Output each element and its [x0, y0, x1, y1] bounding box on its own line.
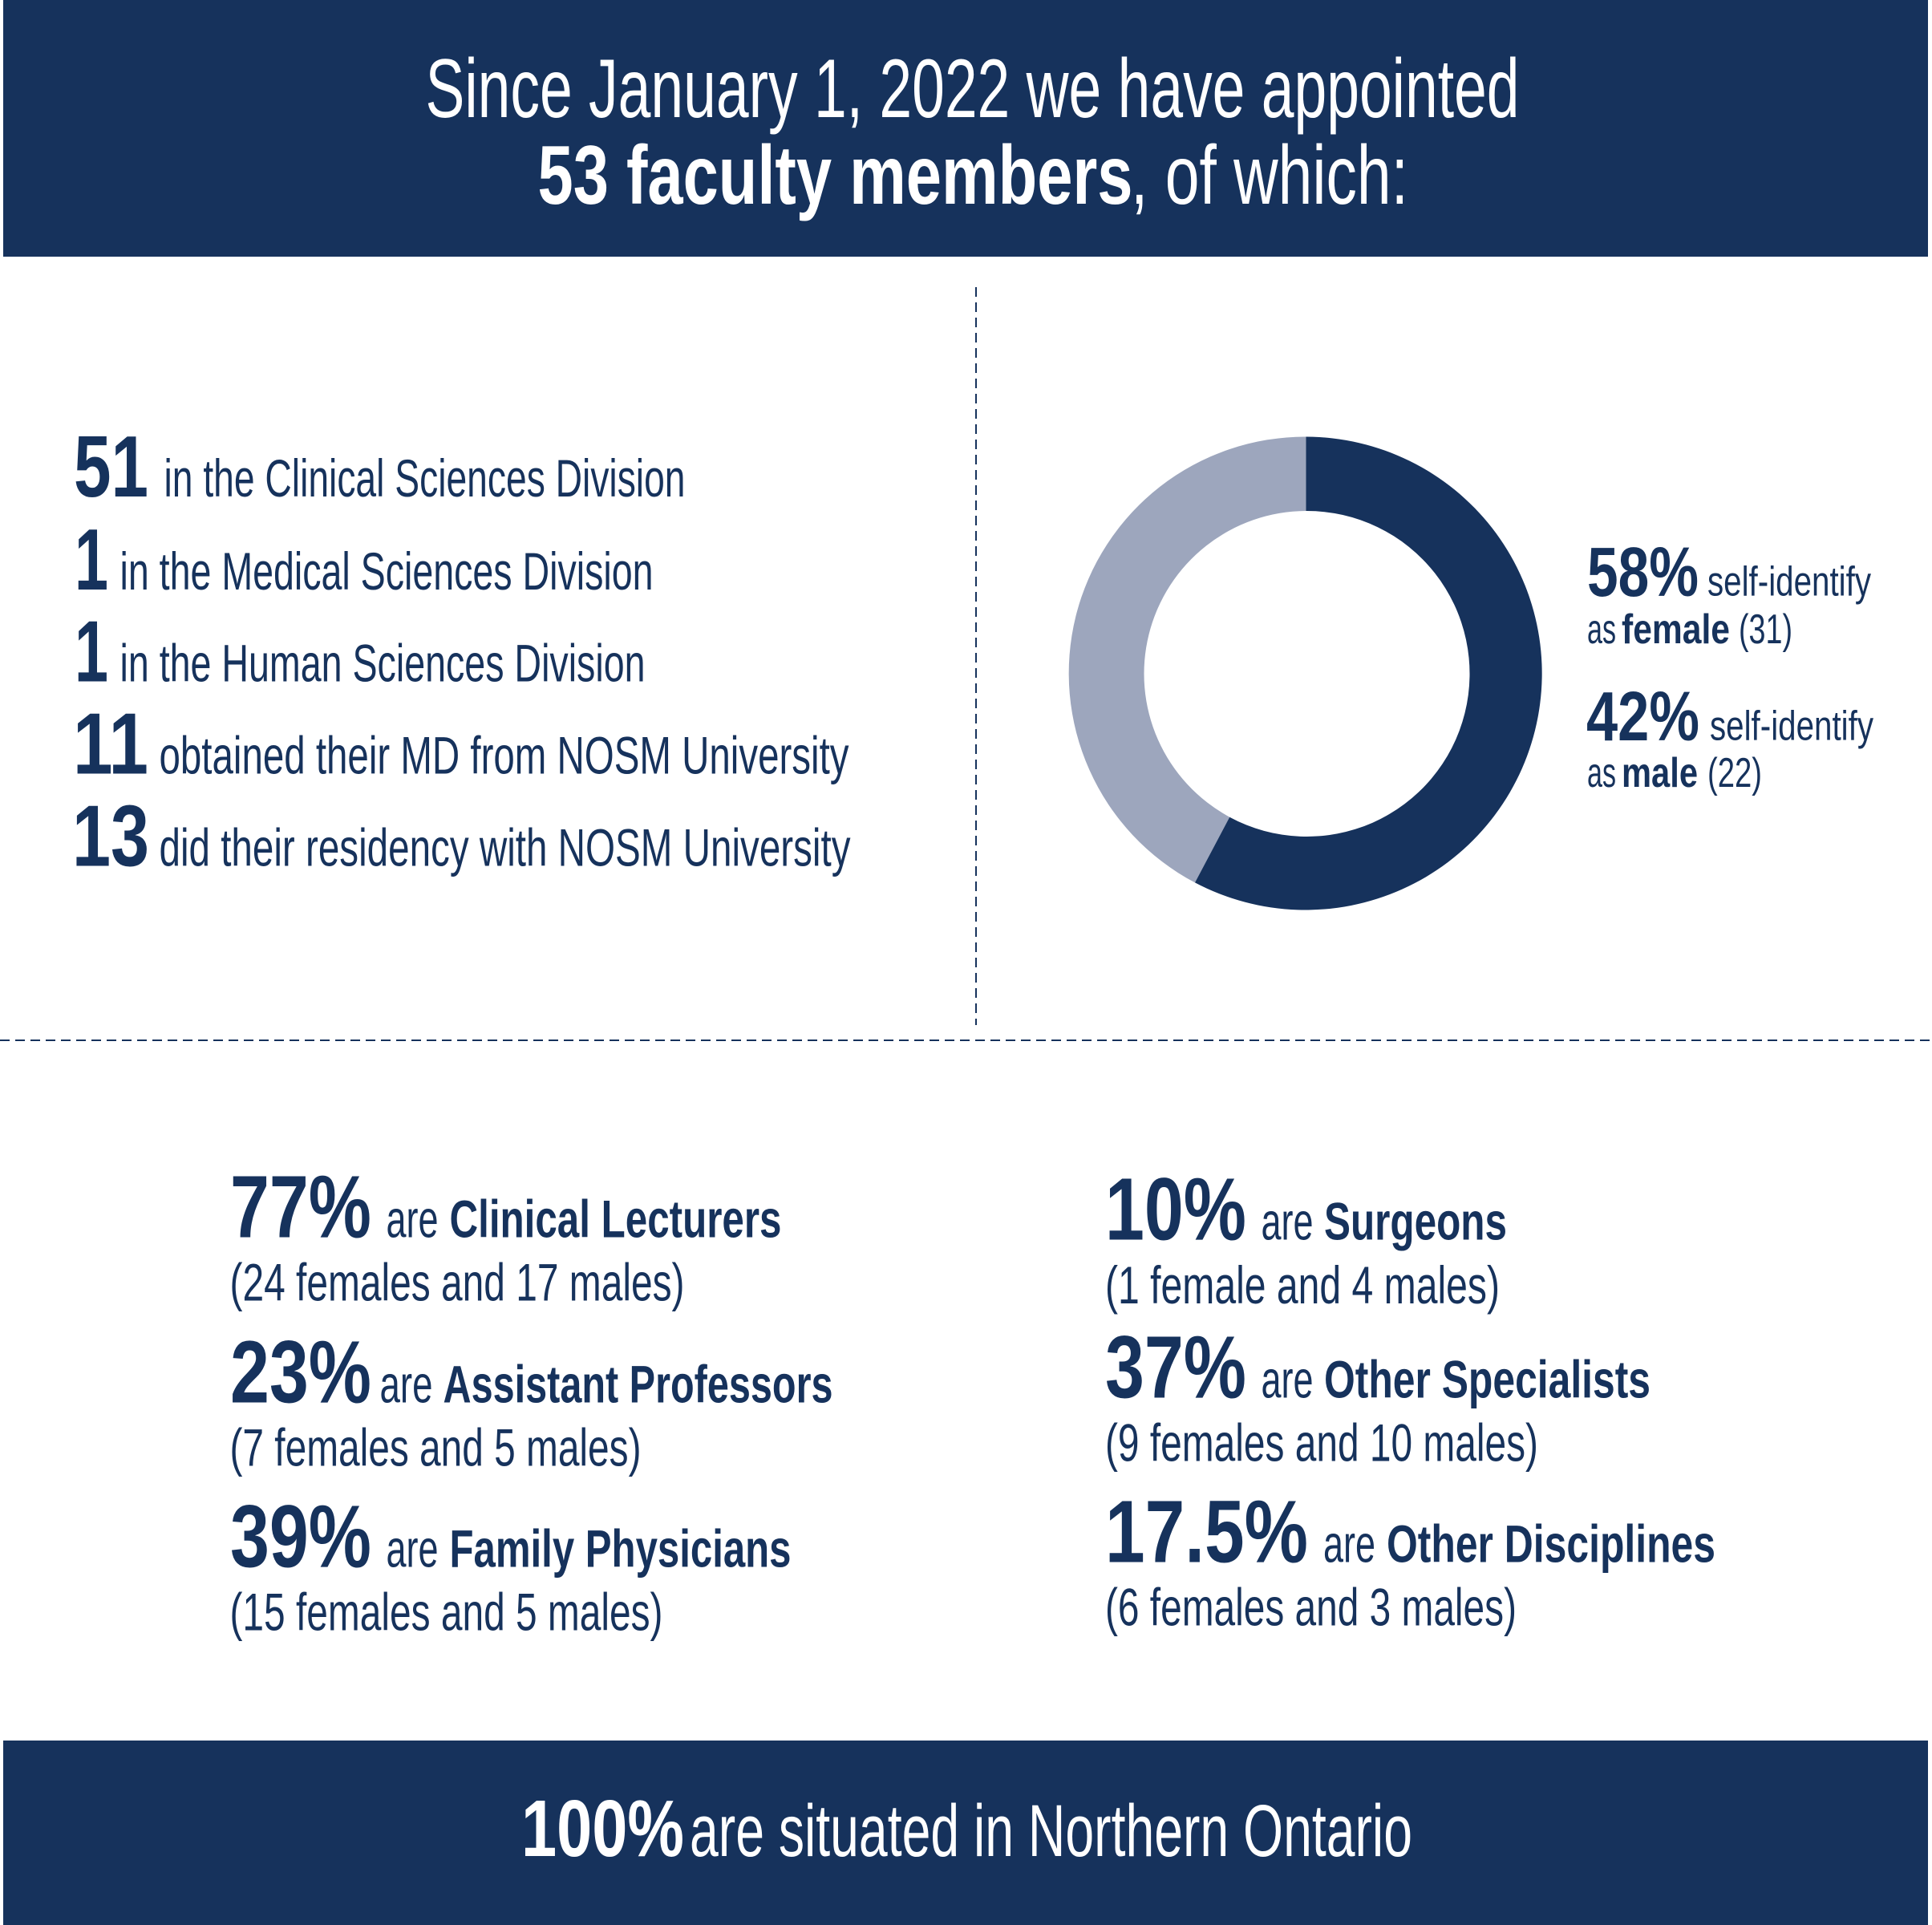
stat: Medical Sciences Division: 1: [75, 511, 108, 609]
legend entry: female: [1587, 533, 1871, 653]
stat: Assistant Professors: Assistant Professors: [443, 1354, 832, 1413]
stat: Other Specialists: Other Specialists: [1324, 1349, 1651, 1408]
stat: Other Specialists: [1105, 1319, 1651, 1473]
header banner: [3, 0, 1928, 257]
legend entry: male: self-identify: [1710, 703, 1873, 749]
stat: Other Disciplines: are: [1323, 1514, 1375, 1574]
stat: Assistant Professors: are: [380, 1354, 433, 1413]
segment: male 42%: [1069, 436, 1306, 882]
stat: Medical Sciences Division: in the Medical Sciences Division: [120, 541, 653, 601]
heading: second line: 53 faculty members: [537, 129, 1132, 222]
stat: Clinical Lecturers: [229, 1158, 781, 1312]
legend entry: male: as: [1587, 750, 1616, 796]
stat: residency with NOSM University: 13: [72, 788, 149, 886]
stat: Surgeons: [1105, 1160, 1507, 1315]
legend entry: female: self-identify: [1707, 558, 1871, 605]
legend entry: male: [1586, 678, 1873, 796]
stat: Human Sciences Division: [75, 603, 645, 701]
heading: second line: , of which:: [1131, 129, 1408, 222]
panel: roles, right column: [1105, 1160, 1715, 1636]
footer statement: 100%: [521, 1784, 684, 1874]
stat: Family Physicians: 39%: [230, 1487, 371, 1587]
stat: Human Sciences Division: in the Human Sciences Division: [120, 634, 645, 693]
stat: Medical Sciences Division: [75, 511, 653, 609]
stat: Family Physicians: are: [387, 1519, 438, 1578]
stat: Surgeons: Surgeons: [1324, 1192, 1507, 1251]
stat: Other Disciplines: (6 females and 3 males): [1105, 1577, 1517, 1636]
stat: Assistant Professors: 23%: [230, 1323, 371, 1421]
stat: Other Specialists: 37%: [1105, 1319, 1246, 1416]
footer banner: [3, 1741, 1928, 1925]
panel: roles, left column: [229, 1158, 832, 1641]
stat: Clinical Lecturers: are: [387, 1189, 438, 1248]
stat: Clinical Sciences Division: [74, 418, 685, 516]
stat: Family Physicians: (15 females and 5 males): [229, 1582, 662, 1641]
stat: Other Disciplines: Other Disciplines: [1387, 1514, 1715, 1574]
panel: division and training counts: [72, 418, 850, 886]
stat: Surgeons: 10%: [1105, 1160, 1246, 1259]
stat: Clinical Sciences Division: in the Clinical Sciences Division: [164, 448, 685, 508]
legend entry: male: 42%: [1586, 678, 1699, 756]
stat: Assistant Professors: (7 females and 5 males): [229, 1418, 642, 1477]
legend entry: female: as: [1587, 606, 1616, 653]
footer statement: [521, 1784, 1412, 1874]
stat: Surgeons: (1 female and 4 males): [1105, 1255, 1500, 1315]
stat: MD from NOSM University: 11: [73, 695, 148, 792]
stat: Other Disciplines: [1105, 1482, 1715, 1636]
stat: MD from NOSM University: obtained their MD from NOSM University: [159, 725, 849, 784]
stat: Family Physicians: [229, 1487, 791, 1641]
stat: Clinical Lecturers: Clinical Lecturers: [449, 1189, 781, 1248]
legend entry: male: male: [1622, 750, 1698, 796]
legend: gender percentages: [1586, 533, 1873, 796]
stat: MD from NOSM University: [73, 695, 849, 792]
legend entry: female: 58%: [1587, 533, 1699, 611]
stat: Other Disciplines: 17.5%: [1105, 1482, 1308, 1582]
segment: female 58%: [1195, 436, 1542, 910]
legend entry: female: female: [1622, 606, 1730, 653]
stat: Assistant Professors: [229, 1323, 832, 1477]
stat: Clinical Lecturers: (24 females and 17 males): [229, 1253, 685, 1312]
stat: Surgeons: are: [1261, 1192, 1314, 1251]
stat: residency with NOSM University: did their residency with NOSM University: [159, 818, 850, 877]
stat: Other Specialists: (9 females and 10 males): [1105, 1413, 1538, 1473]
legend entry: male: (22): [1707, 750, 1762, 796]
stat: Clinical Lecturers: 77%: [230, 1158, 371, 1256]
legend entry: female: (31): [1739, 606, 1792, 653]
stat: Clinical Sciences Division: 51: [74, 418, 148, 516]
donut chart: gender split: [1069, 436, 1542, 910]
footer statement: are situated in Northern Ontario: [690, 1790, 1412, 1872]
stat: Family Physicians: Family Physicians: [449, 1519, 791, 1578]
stat: residency with NOSM University: [72, 788, 850, 886]
stat: Other Specialists: are: [1261, 1349, 1314, 1408]
stat: Human Sciences Division: 1: [75, 603, 108, 701]
